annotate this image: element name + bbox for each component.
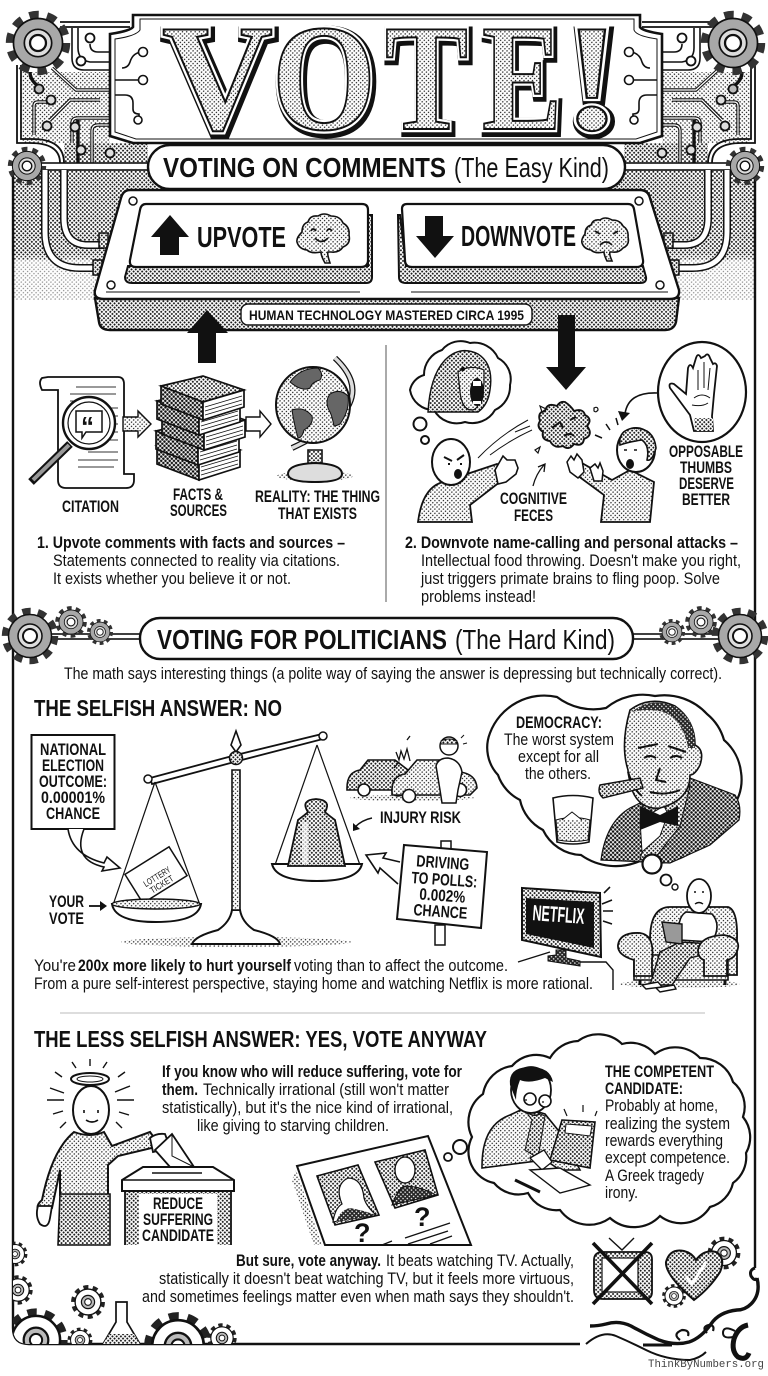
text block: point 1: It exists whether you believe it or not. (53, 569, 291, 588)
text block: but sure: But sure, vote anyway. (236, 1251, 381, 1270)
icon: netflix tv: NETFLIX (532, 900, 586, 929)
label: cognitive feces: COGNITIVE (500, 490, 567, 508)
icon: whisky glass (553, 796, 593, 844)
thought cloud: churchill (487, 695, 742, 890)
ballot box label: REDUCE (153, 1195, 203, 1213)
title: VOTE!: T (387, 0, 470, 164)
icon: ballot paper with candidates (292, 1136, 471, 1248)
label: cognitive feces (500, 464, 567, 525)
sign: driving to polls (366, 841, 487, 945)
text block: less selfish: them. (162, 1080, 198, 1099)
candidate photo: man (375, 1150, 438, 1208)
downvote key (398, 204, 646, 283)
gears: left cluster (6, 609, 111, 660)
text block: point 1: Statements connected to reality via citations. (53, 551, 340, 570)
person (642, 879, 717, 992)
icon: books (156, 376, 245, 480)
label: reality (255, 488, 380, 523)
gear: top left (11, 16, 65, 70)
label: opposable thumbs: THUMBS (680, 459, 732, 477)
label: your vote: VOTE (49, 910, 84, 928)
label: reality: REALITY: THE THING (255, 488, 380, 506)
console label: HUMAN TECHNOLOGY MASTERED CIRCA 1995 (249, 307, 524, 323)
label: your vote (49, 893, 107, 928)
text block: selfish conclusion: voting than to affect the outcome. (294, 956, 508, 975)
section heading: voting on comments: VOTING ON COMMENTS (163, 152, 446, 183)
section heading: voting on comments (148, 145, 625, 189)
label: injury risk: INJURY RISK (380, 809, 461, 827)
arrow (246, 411, 271, 437)
text block: selfish conclusion: 200x more likely to hurt yourself (78, 956, 291, 975)
scale base and pillar (192, 731, 280, 944)
label: injury risk (353, 809, 461, 831)
voting console (95, 190, 679, 330)
icon: netflix tv (518, 887, 613, 990)
sign: driving to polls: CHANCE (413, 901, 468, 923)
quote text: the others. (525, 764, 591, 783)
scale beam (150, 734, 323, 784)
icon: person in armchair (618, 879, 740, 992)
gear: mid left (11, 150, 43, 182)
panel: upvote (31, 358, 380, 588)
label: opposable thumbs: BETTER (682, 491, 730, 509)
center divider (385, 345, 387, 602)
text block: but sure (142, 1251, 574, 1306)
icon: down arrow (416, 216, 454, 258)
console base (95, 298, 679, 330)
sign: driving to polls: 0.002% (419, 886, 466, 907)
title: VOTE!: E (484, 0, 564, 164)
label: opposable thumbs: DESERVE (679, 475, 734, 493)
icon: heart with gears (664, 1239, 738, 1306)
label: opposable thumbs (669, 443, 743, 509)
console label (241, 304, 532, 325)
panel: downvote (405, 341, 746, 606)
label: facts and sources: SOURCES (170, 502, 227, 520)
text block: but sure: and sometimes feelings matter even when math says they shouldn't. (142, 1287, 574, 1306)
thought cloud: competent candidate (444, 1034, 750, 1227)
section heading: voting for politicians (6, 609, 764, 660)
arrow (68, 829, 120, 871)
heading: less selfish answer: THE LESS SELFISH ANSWER: YES, VOTE ANYWAY (34, 1026, 487, 1052)
text block: point 2: problems instead! (421, 587, 536, 606)
icon: happy brain (297, 214, 349, 263)
icon: ballot box (122, 1134, 234, 1245)
bottom right flourish (586, 1268, 758, 1360)
candidate text: Probably at home, (605, 1096, 718, 1115)
heading: the selfish answer: THE SELFISH ANSWER: NO (34, 695, 282, 721)
callout: national election outcome: OUTCOME: (39, 773, 107, 791)
candidate text: THE COMPETENT (605, 1063, 714, 1081)
icon: citation scroll: “ (81, 411, 94, 441)
icon: up arrow (151, 215, 189, 255)
icon: flask (103, 1302, 140, 1344)
sign: driving to polls: TO POLLS: (411, 869, 478, 892)
candidate text: except competence. (605, 1148, 730, 1167)
text block: point 2 (405, 533, 741, 606)
callout: national election outcome: CHANCE (46, 805, 100, 823)
text block: less selfish (162, 1062, 462, 1135)
callout: national election outcome: ELECTION (42, 757, 104, 775)
pipe rail (40, 163, 732, 170)
arrow (366, 853, 400, 884)
icon: crossed out tv (593, 1238, 652, 1304)
title: VOTE!: V (164, 0, 275, 164)
candidate text: A Greek tragedy (605, 1166, 704, 1185)
gear: mid right (729, 150, 761, 182)
label: citation: CITATION (62, 498, 119, 516)
portrait: churchill (599, 701, 740, 863)
gears: right cluster (661, 609, 764, 660)
label: facts and sources (170, 486, 227, 520)
icon: ballot paper with candidates: ? (414, 1202, 430, 1232)
section heading: voting for politicians: (The Hard Kind) (455, 624, 615, 655)
text block: but sure: It beats watching TV. Actually, (386, 1251, 574, 1270)
ballot box label: SUFFERING (143, 1211, 213, 1229)
text block: point 1: 1. Upvote comments with facts and sources – (37, 533, 345, 552)
figure: angry man (418, 439, 518, 522)
header circuit decoration (11, 16, 761, 182)
left pan with lottery ticket: TICKET (148, 873, 176, 895)
candidate photo: woman (317, 1165, 379, 1225)
text block: selfish conclusion (34, 956, 593, 993)
icon: citation scroll (31, 377, 134, 488)
icon: ballot paper with candidates: ? (354, 1218, 370, 1248)
arrow: hand to victim (618, 393, 657, 421)
text block: selfish conclusion: From a pure self-interest perspective, staying home and watching Netflix is more rational. (34, 974, 593, 993)
upvote key (125, 204, 372, 283)
console top (95, 190, 679, 299)
watermark: ThinkByNumbers.org (648, 1359, 764, 1371)
callout: national election outcome: 0.00001% (41, 789, 105, 807)
ballot box label: CANDIDATE (142, 1227, 214, 1245)
quote text (504, 714, 614, 783)
arrow: big down (546, 315, 586, 390)
text block: less selfish: like giving to starving children. (197, 1116, 389, 1135)
left pan with lottery ticket (112, 847, 201, 922)
figure: victim (567, 418, 656, 522)
icon: ape (428, 351, 491, 412)
arrow (123, 411, 151, 437)
section heading: voting on comments: (The Easy Kind) (454, 152, 609, 183)
icon: globe (276, 358, 353, 482)
figure: candidate with calculator (482, 1067, 597, 1193)
bottom left gears and flask decoration (13, 1242, 237, 1344)
arrow: big up (187, 310, 228, 363)
ballot box label (142, 1195, 214, 1245)
left pan with lottery ticket: LOTTERY (142, 865, 172, 889)
icon: car crash and injured man (347, 735, 477, 803)
candidate text (605, 1063, 730, 1202)
quote text: except for all (518, 747, 599, 766)
background halftone behind console (14, 170, 756, 300)
label: cognitive feces: FECES (514, 507, 553, 525)
icon: hand in circle (658, 342, 746, 442)
downvote key: DOWNVOTE (461, 221, 576, 253)
right pan with weight (272, 799, 362, 881)
sign: driving to polls: DRIVING (416, 852, 470, 874)
text block: less selfish: statistically), but it's the nice kind of irrational, (162, 1098, 453, 1117)
text block: but sure: statistically it doesn't beat watching TV, but it feels more virtuous, (159, 1269, 574, 1288)
figure: halo person voting (37, 1059, 168, 1245)
text block: selfish conclusion: You're (34, 956, 76, 975)
label: reality: THAT EXISTS (278, 505, 357, 523)
title: VOTE!: ! (564, 0, 624, 164)
text block: less selfish: Technically irrational (still won't matter (203, 1080, 449, 1099)
title: VOTE! (162, 0, 624, 164)
upvote key: UPVOTE (197, 222, 286, 254)
icon: sad brain (582, 218, 628, 261)
thought cloud: ape (410, 341, 511, 444)
pipes to console (45, 170, 727, 275)
label: facts and sources: FACTS & (173, 486, 223, 504)
text block: point 1 (37, 533, 345, 588)
quote text: The worst system (504, 730, 614, 749)
section heading: voting for politicians: VOTING FOR POLITICIANS (157, 624, 447, 655)
quote text: DEMOCRACY: (516, 714, 602, 732)
candidate text: CANDIDATE: (605, 1080, 683, 1098)
icon: thrown feces (478, 402, 598, 458)
text block: less selfish: If you know who will reduce suffering, vote for (162, 1062, 462, 1081)
candidate text: irony. (605, 1183, 638, 1202)
candidate text: realizing the system (605, 1114, 730, 1133)
title: VOTE!: O (274, 0, 378, 164)
callout: national election outcome (32, 735, 120, 871)
balance scale (112, 731, 362, 947)
callout: national election outcome: NATIONAL (40, 741, 106, 759)
text block: point 2: just triggers primate brains to fling poop. Solve (420, 569, 720, 588)
title plaque (110, 0, 662, 164)
gear: top right (706, 16, 760, 70)
candidate text: rewards everything (605, 1131, 723, 1150)
label: your vote: YOUR (49, 893, 84, 911)
